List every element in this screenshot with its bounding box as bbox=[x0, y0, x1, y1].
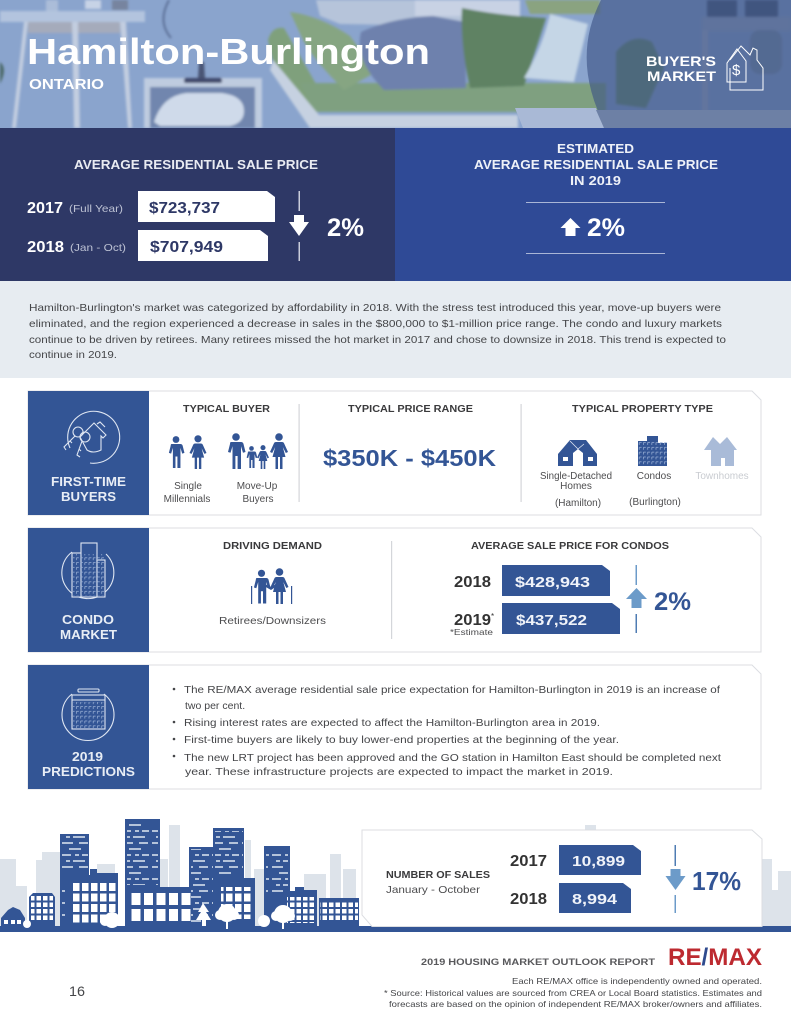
panel: 2019 predictions bbox=[28, 665, 761, 789]
column: typical buyer bbox=[164, 404, 288, 505]
prediction list: The RE/MAX average residential sale price expectation for Hamilton-Burlington in 2019 is an increase of bbox=[184, 684, 720, 696]
sidebar: condo market: CONDO bbox=[62, 612, 114, 627]
tower brick patterns bbox=[61, 823, 288, 923]
column: typical property type: Condos bbox=[637, 471, 671, 482]
panel: condo market bbox=[28, 528, 761, 652]
heading: ESTIMATED bbox=[557, 142, 634, 156]
heading bbox=[474, 142, 718, 188]
change: 2 percent: 2% bbox=[327, 214, 364, 242]
lamp bbox=[184, 78, 222, 83]
icon: retirees bbox=[251, 568, 292, 604]
disclaimer: Each RE/MAX office is independently owned and operated. bbox=[512, 976, 762, 986]
report title: 2019 HOUSING MARKET OUTLOOK REPORT bbox=[421, 957, 655, 968]
RE/MAX logo: RE/MAX bbox=[668, 944, 762, 971]
market badge: BUYER'S bbox=[646, 53, 716, 69]
header photo banner bbox=[0, 0, 791, 128]
column: typical price range bbox=[323, 404, 496, 471]
disclaimer bbox=[384, 976, 762, 1009]
arrow: up bbox=[560, 218, 580, 236]
prediction list: Rising interest rates are expected to affect the Hamilton-Burlington area in 2019. bbox=[184, 717, 600, 729]
icon: single millennials bbox=[169, 435, 206, 469]
sidebar: first-time buyers bbox=[28, 391, 149, 515]
row: 2018 condo price bbox=[454, 565, 610, 596]
row: 2017 sales: 10,899 bbox=[572, 853, 625, 870]
right shelf bbox=[702, 17, 791, 31]
left table bbox=[0, 11, 145, 22]
prediction list: year. These infrastructure projects are expected to impact the market in 2019. bbox=[185, 766, 613, 778]
row: 2017 sales: 2017 bbox=[510, 853, 547, 870]
column: typical property type bbox=[540, 404, 749, 509]
row: 2018 sales: 2018 bbox=[510, 891, 547, 908]
summary paragraph: Hamilton-Burlington's market was categorized by affordability in 2018. With the stress test introduced this year, move-up buyers were bbox=[29, 302, 721, 314]
column: typical price range: $350K - $450K bbox=[323, 445, 496, 471]
panel: number of sales bbox=[362, 830, 762, 926]
prediction list: two per cent. bbox=[185, 700, 245, 712]
row: 2017 price: 2017 bbox=[27, 200, 63, 217]
change: 17 percent: 17% bbox=[692, 866, 741, 896]
foreground buildings bbox=[0, 819, 791, 932]
row: 2018 condo price: $428,943 bbox=[515, 574, 590, 591]
icon: house with dollar sign: $ bbox=[732, 62, 741, 79]
change: 2 percent: 2% bbox=[587, 214, 625, 242]
column: typical property type: Single-Detached bbox=[540, 471, 612, 482]
prediction list bbox=[173, 684, 721, 778]
arrow: down bbox=[666, 845, 686, 913]
heading: IN 2019 bbox=[570, 174, 621, 188]
sofa bbox=[266, 26, 316, 106]
column: typical buyer: Move-Up bbox=[237, 481, 278, 492]
market badge: MARKET bbox=[647, 68, 717, 84]
column: typical buyer: Single bbox=[174, 481, 202, 492]
row: 2019 condo price: *Estimate bbox=[450, 627, 493, 637]
disclaimer: forecasts are based on the opinion of independent RE/MAX broker/owners and affiliates. bbox=[389, 999, 762, 1009]
change: 2 percent: 2% bbox=[654, 588, 691, 616]
row: 2018 price: $707,949 bbox=[150, 239, 223, 256]
row: 2019 condo price bbox=[450, 603, 620, 637]
foreground table bbox=[515, 108, 604, 128]
column: typical buyer: TYPICAL BUYER bbox=[183, 404, 271, 415]
icon: condos bbox=[638, 436, 667, 466]
panel: estimated price in 2019 bbox=[395, 128, 791, 281]
row: 2018 condo price: 2018 bbox=[454, 574, 491, 591]
disclaimer: * Source: Historical values are sourced from CREA or Local Board statistics. Estimates and bbox=[384, 988, 762, 998]
row: 2019 condo price: $437,522 bbox=[516, 612, 587, 629]
side cabinet bbox=[150, 86, 256, 128]
sidebar: condo market bbox=[28, 528, 149, 652]
row: 2018 sales: 8,994 bbox=[572, 891, 618, 908]
row: 2017 price bbox=[27, 191, 275, 222]
column: driving demand: DRIVING DEMAND bbox=[223, 541, 322, 552]
column: driving demand bbox=[219, 541, 326, 627]
column: average sale price for condos bbox=[450, 541, 691, 637]
panel: first-time buyers bbox=[28, 391, 761, 515]
row: 2018 price: (Jan - Oct) bbox=[70, 242, 126, 254]
title: Hamilton-Burlington bbox=[27, 31, 430, 72]
summary paragraph bbox=[0, 281, 791, 378]
building windows bbox=[4, 882, 358, 924]
sidebar: 2019 predictions: PREDICTIONS bbox=[42, 764, 135, 779]
row: 2018 sales bbox=[510, 883, 631, 913]
heading: AVERAGE RESIDENTIAL SALE PRICE bbox=[74, 158, 318, 172]
column: typical buyer: Millennials bbox=[164, 494, 210, 505]
summary paragraph: continue to be driven by retirees. Many retirees missed the hot market in 2017 and chose to downsize in 2018. This trend is expected to bbox=[29, 334, 726, 346]
sidebar: 2019 predictions bbox=[28, 665, 149, 789]
column: typical price range: TYPICAL PRICE RANGE bbox=[348, 404, 473, 415]
label: NUMBER OF SALES bbox=[386, 870, 490, 881]
column: typical property type: Homes bbox=[560, 481, 592, 492]
column: typical property type: (Burlington) bbox=[629, 497, 681, 508]
sidebar: first-time buyers: FIRST-TIME bbox=[51, 474, 126, 489]
icon: move-up family bbox=[228, 433, 288, 469]
darker circular overlay bbox=[586, 0, 791, 110]
row: 2017 price: (Full Year) bbox=[69, 203, 123, 215]
row: 2018 price bbox=[27, 230, 268, 261]
row: 2019 condo price: * bbox=[491, 612, 494, 621]
sidebar: first-time buyers: BUYERS bbox=[61, 489, 116, 504]
row: 2017 price: $723,737 bbox=[149, 200, 220, 217]
icon: townhomes bbox=[704, 437, 737, 466]
column: typical property type: TYPICAL PROPERTY TYPE bbox=[572, 404, 713, 415]
prediction list: First-time buyers are likely to buy lower-end properties at the beginning of the year. bbox=[184, 734, 619, 746]
summary paragraph: continue in 2019. bbox=[29, 349, 117, 361]
arrow: up bbox=[626, 565, 647, 633]
subtitle: Ontario: ONTARIO bbox=[29, 77, 104, 93]
label: January - October bbox=[386, 884, 481, 896]
icon: condo towers bbox=[62, 543, 114, 599]
column: typical property type: (Hamilton) bbox=[555, 498, 601, 509]
trees bbox=[23, 903, 295, 929]
row: 2018 price: 2018 bbox=[27, 239, 64, 256]
page number: 16 bbox=[69, 983, 85, 999]
arrow: down bbox=[289, 191, 309, 261]
column: driving demand: Retirees/Downsizers bbox=[219, 615, 326, 627]
sidebar: condo market: MARKET bbox=[60, 627, 117, 642]
column: typical buyer: Buyers bbox=[242, 494, 274, 505]
sidebar: 2019 predictions: 2019 bbox=[72, 749, 103, 764]
sofa frame bbox=[270, 60, 518, 128]
market badge bbox=[646, 46, 763, 90]
background buildings bbox=[0, 825, 791, 927]
label bbox=[386, 870, 490, 896]
column: typical property type: Townhomes bbox=[695, 471, 749, 482]
icon: keys and house bbox=[64, 411, 120, 463]
row: 2019 condo price: 2019 bbox=[454, 612, 491, 629]
icon: detached home bbox=[558, 440, 597, 466]
skyline illustration bbox=[0, 819, 791, 932]
column: average sale price for condos: AVERAGE SALE PRICE FOR CONDOS bbox=[471, 541, 669, 552]
panel: average residential sale price bbox=[0, 128, 395, 281]
heading: AVERAGE RESIDENTIAL SALE PRICE bbox=[474, 158, 718, 172]
summary paragraph: eliminated, and the region experienced a decrease in sales in the $800,000 to $1-million price range. The condo and luxury markets bbox=[29, 318, 722, 330]
prediction list: The new LRT project has been approved and the GO station in Hamilton East should be completed next bbox=[184, 752, 721, 764]
icon: calendar bbox=[62, 689, 114, 740]
row: 2017 sales bbox=[510, 845, 641, 875]
